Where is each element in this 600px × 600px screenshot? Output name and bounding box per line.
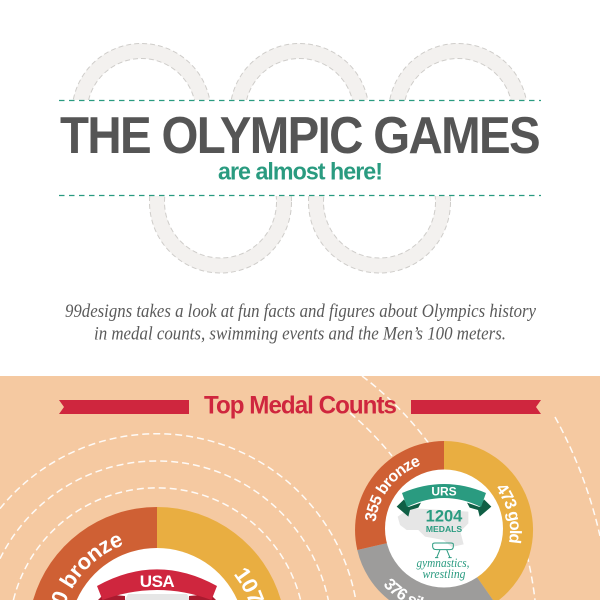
- section heading: Top Medal Counts: [204, 391, 396, 419]
- gold segment: [444, 441, 533, 600]
- donut chart: URS: [355, 441, 533, 600]
- bronze segment: [355, 441, 444, 550]
- icon: pommel horse: [433, 543, 453, 558]
- map silhouette: [125, 594, 190, 600]
- ribbon tails: [397, 499, 491, 517]
- sport names: gymnastics,: [416, 555, 470, 570]
- ribbon tails: [98, 594, 216, 600]
- sport names: [416, 555, 470, 581]
- gold segment: [157, 507, 281, 600]
- country label: USA: [140, 572, 174, 591]
- title: THE OLYMPIC GAMES: [60, 107, 539, 165]
- center disc: [77, 548, 237, 600]
- bronze segment: [33, 507, 157, 600]
- sport names: wrestling: [422, 566, 466, 581]
- ribbon: left: [59, 400, 189, 414]
- center disc: [385, 470, 503, 588]
- olympic rings: bottom row: [149, 196, 451, 274]
- medal caption: MEDALS: [426, 524, 462, 534]
- olympic rings: top row: [73, 43, 526, 100]
- subtitle: are almost here!: [218, 158, 382, 186]
- donut chart: USA: [33, 507, 281, 600]
- panel: top medal counts: [0, 376, 600, 600]
- intro text: in medal counts, swimming events and the Men’s 100 meters.: [94, 324, 506, 344]
- bronze label: 355 bronze: [365, 458, 420, 522]
- dashed track lanes: [0, 376, 600, 600]
- intro text: [65, 301, 536, 344]
- panel background: [0, 376, 600, 600]
- ribbon banner: [402, 484, 486, 507]
- gold label: 473 gold: [497, 486, 522, 544]
- ribbon banner: [97, 569, 217, 600]
- map silhouette: [398, 508, 468, 547]
- ribbon: right: [411, 400, 541, 414]
- country label: URS: [431, 484, 457, 498]
- intro text: 99designs takes a look at fun facts and figures about Olympics history: [65, 301, 536, 322]
- medal total: 1204: [426, 508, 463, 526]
- silver segment: [357, 530, 493, 600]
